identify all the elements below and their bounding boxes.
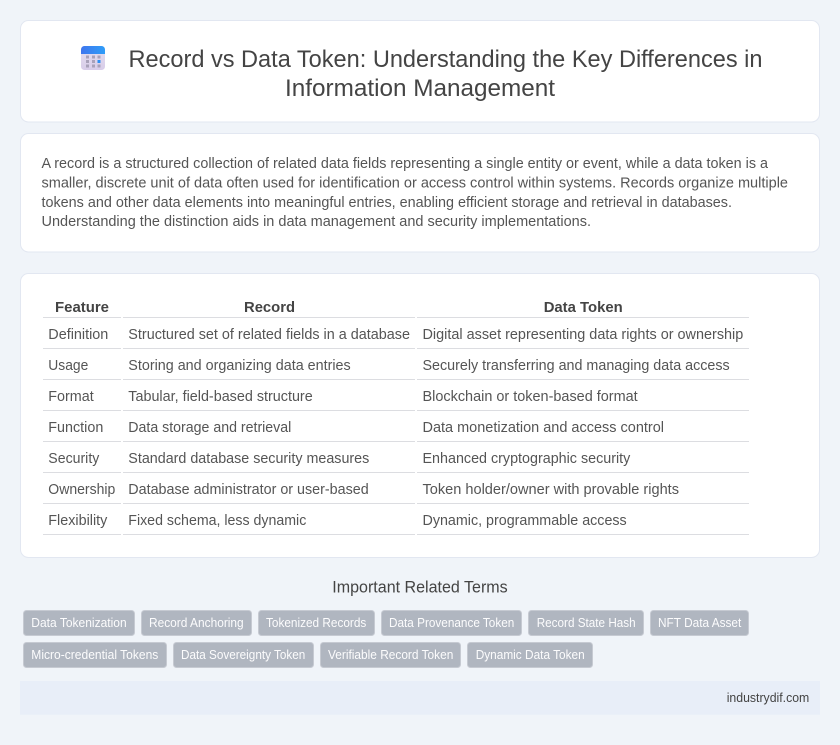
table header row: Record [244,299,295,316]
footer bar [20,681,820,715]
table header row: Feature [55,299,109,316]
row: Usage: Securely transferring and managing data access [422,358,730,374]
row: Format [43,389,749,411]
row: Usage [43,358,749,380]
row: Function: Data monetization and access control [422,420,664,436]
tag: Record Anchoring: Record Anchoring [149,616,244,630]
row: Definition: Digital asset representing data rights or ownership [422,327,743,343]
row: Ownership: Token holder/owner with provable rights [422,482,679,498]
tag: Record Anchoring [142,610,252,636]
tag: Tokenized Records: Tokenized Records [266,616,366,630]
tag: Data Sovereignty Token [174,642,314,668]
row: Format: Blockchain or token-based format [422,389,638,405]
intro text block: smaller, discrete unit of data often used for identification or access control within systems. Records organize multiple [42,176,788,192]
tag: Record State Hash: Record State Hash [537,616,636,630]
panel: introduction [20,134,820,252]
row: Flexibility: Dynamic, programmable access [422,513,627,529]
row: Definition: Structured set of related fields in a database [128,327,410,343]
table header row: Data Token [544,299,623,316]
tag: Data Provenance Token [382,610,522,636]
row: Security: Enhanced cryptographic security [422,451,631,467]
tag: Data Provenance Token: Data Provenance Token [389,616,514,630]
panel: title header [20,20,820,122]
row: Definition: Definition [48,327,108,343]
row: Usage: Storing and organizing data entries [128,358,351,374]
row: Security: Standard database security measures [128,451,369,467]
tag: Data Sovereignty Token: Data Sovereignty Token [181,648,305,662]
row: Format: Tabular, field-based structure [128,389,313,405]
tag: Data Tokenization [24,610,134,636]
row: Function: Data storage and retrieval [128,420,291,436]
row: Function: Function [48,420,103,436]
tag: Dynamic Data Token [468,642,592,668]
tag: Verifiable Record Token [320,642,460,668]
title: Information Management [285,76,555,102]
row: Ownership: Database administrator or user-based [128,482,369,498]
row: Security: Security [48,451,100,467]
title: Record vs Data Token: Understanding the Key Differences in [128,47,762,73]
row: Definition [43,327,749,349]
tag: NFT Data Asset: NFT Data Asset [658,616,742,630]
row: Flexibility: Fixed schema, less dynamic [128,513,306,529]
tag: NFT Data Asset [650,610,748,636]
heading: related terms: Important Related Terms [332,578,508,596]
tag: Record State Hash [528,610,644,636]
tag: Micro-credential Tokens [24,642,166,668]
row: Security [43,451,749,473]
row: Format: Format [48,389,94,405]
row: Flexibility: Flexibility [48,513,108,529]
tag: Dynamic Data Token: Dynamic Data Token [476,648,585,662]
intro text block: tokens and other data elements into meaningful entries, enabling efficient storage and retrieval in databases. [42,195,732,211]
panel: comparison table [20,274,820,558]
row: Function [43,420,749,442]
row: Ownership [43,482,749,504]
related term tags [24,610,748,668]
table header row [43,299,749,318]
row: Flexibility [43,513,749,535]
row: Ownership: Ownership [48,482,115,498]
tag: Data Tokenization: Data Tokenization [31,616,127,630]
icon: calendar [81,46,105,70]
intro text block: A record is a structured collection of related data fields representing a single entity or event, while a data token is a [42,156,769,172]
tag: Tokenized Records [258,610,374,636]
title [128,47,762,102]
intro text block: Understanding the distinction aids in data management and security implementations. [42,214,591,230]
row: Usage: Usage [48,358,88,374]
intro text block [42,156,788,230]
tag: Micro-credential Tokens: Micro-credential Tokens [31,648,158,662]
footer source text: industrydif.com [727,690,809,705]
tag: Verifiable Record Token: Verifiable Record Token [328,648,453,662]
